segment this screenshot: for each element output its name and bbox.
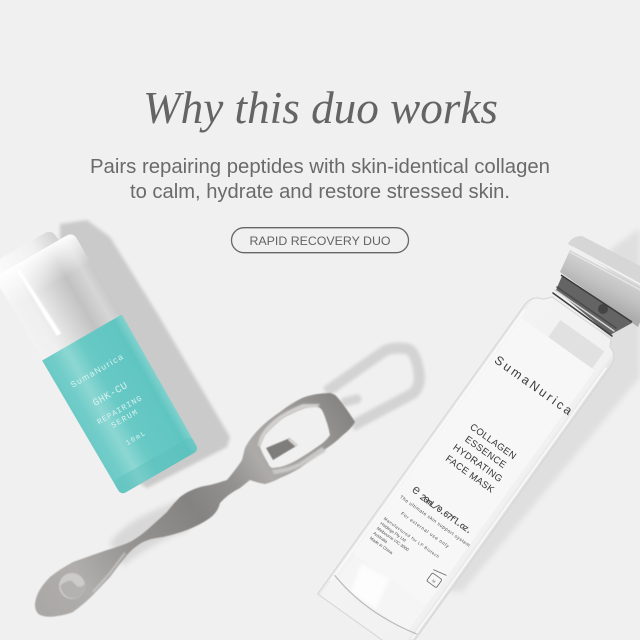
spatula body bbox=[35, 393, 355, 617]
subtitle text: to calm, hydrate and restore stressed skin. bbox=[130, 181, 510, 203]
teal bottle body bbox=[42, 314, 200, 496]
dark crimp bbox=[556, 276, 632, 335]
product: facial spatula tool bbox=[35, 393, 355, 617]
label fine print: Manufactured for LP Biotech bbox=[383, 516, 441, 559]
serum label text: SERUM bbox=[110, 408, 140, 431]
metal collar bbox=[560, 250, 640, 327]
label brand: SumaNurica bbox=[492, 353, 575, 418]
inner glass rim lines bbox=[331, 309, 606, 639]
label product name: HYDRATING bbox=[451, 442, 504, 485]
label product name: FACE MASK bbox=[443, 453, 496, 496]
label fine print: The ultimate skin support system bbox=[398, 494, 471, 549]
label product name: ESSENCE bbox=[463, 434, 508, 471]
serum label text: 10mL bbox=[125, 430, 147, 448]
subtitle text: Pairs repairing peptides with skin-identical collagen bbox=[90, 156, 550, 178]
flip top bbox=[568, 236, 640, 297]
label product name bbox=[443, 421, 520, 496]
vial base rim bbox=[331, 575, 417, 639]
white cap bbox=[0, 232, 121, 360]
label fine print: For external use only bbox=[399, 511, 450, 550]
serum label text: SumaNurica bbox=[68, 351, 125, 390]
serum label text: GHK-CU bbox=[92, 381, 130, 410]
volume line bbox=[409, 481, 477, 537]
badge: rapid recovery duo: RAPID RECOVERY DUO bbox=[250, 234, 390, 248]
engraved logo bbox=[59, 573, 85, 599]
inner tab bbox=[266, 438, 298, 460]
label fine print: Made in China bbox=[369, 535, 394, 556]
inner fluid highlight bbox=[548, 320, 604, 369]
shadow: spatula ring bbox=[326, 348, 419, 426]
subtitle text bbox=[90, 156, 550, 203]
vial stopper and cap bbox=[553, 236, 640, 336]
cap nub bbox=[0, 229, 60, 282]
product: collagen essence hydrating face mask vial bbox=[318, 286, 624, 640]
shadow: serum bottle bbox=[60, 220, 230, 488]
label fine print bbox=[369, 494, 471, 589]
label fine print: Australia bbox=[372, 531, 389, 544]
glass vial body bbox=[318, 286, 624, 640]
label fine print: Holdings Pty Ltd bbox=[379, 521, 408, 543]
serum label text: REPAIRING bbox=[96, 394, 144, 427]
icon: opened jar bbox=[426, 567, 446, 588]
handle highlight edge bbox=[93, 553, 125, 592]
product: GHK-CU repairing serum bottle bbox=[0, 220, 200, 498]
badge: rapid recovery duo bbox=[232, 228, 408, 253]
serum label text bbox=[68, 351, 164, 457]
label fine print: Melbourne VIC 3000 bbox=[376, 526, 410, 552]
ring highlight bbox=[258, 404, 320, 447]
shadow: vial bbox=[430, 228, 640, 592]
title: Why this duo works bbox=[143, 83, 498, 133]
icon: opened jar: M bbox=[431, 578, 437, 584]
volume line: 20mL/0.67fl.oz. bbox=[418, 492, 474, 537]
shadow: spatula handle bbox=[110, 500, 190, 566]
neck rings bbox=[553, 287, 616, 336]
label product name: COLLAGEN bbox=[468, 422, 518, 462]
white label bbox=[353, 318, 595, 605]
volume line: e bbox=[410, 481, 424, 498]
mask crystals at base bbox=[336, 555, 426, 632]
